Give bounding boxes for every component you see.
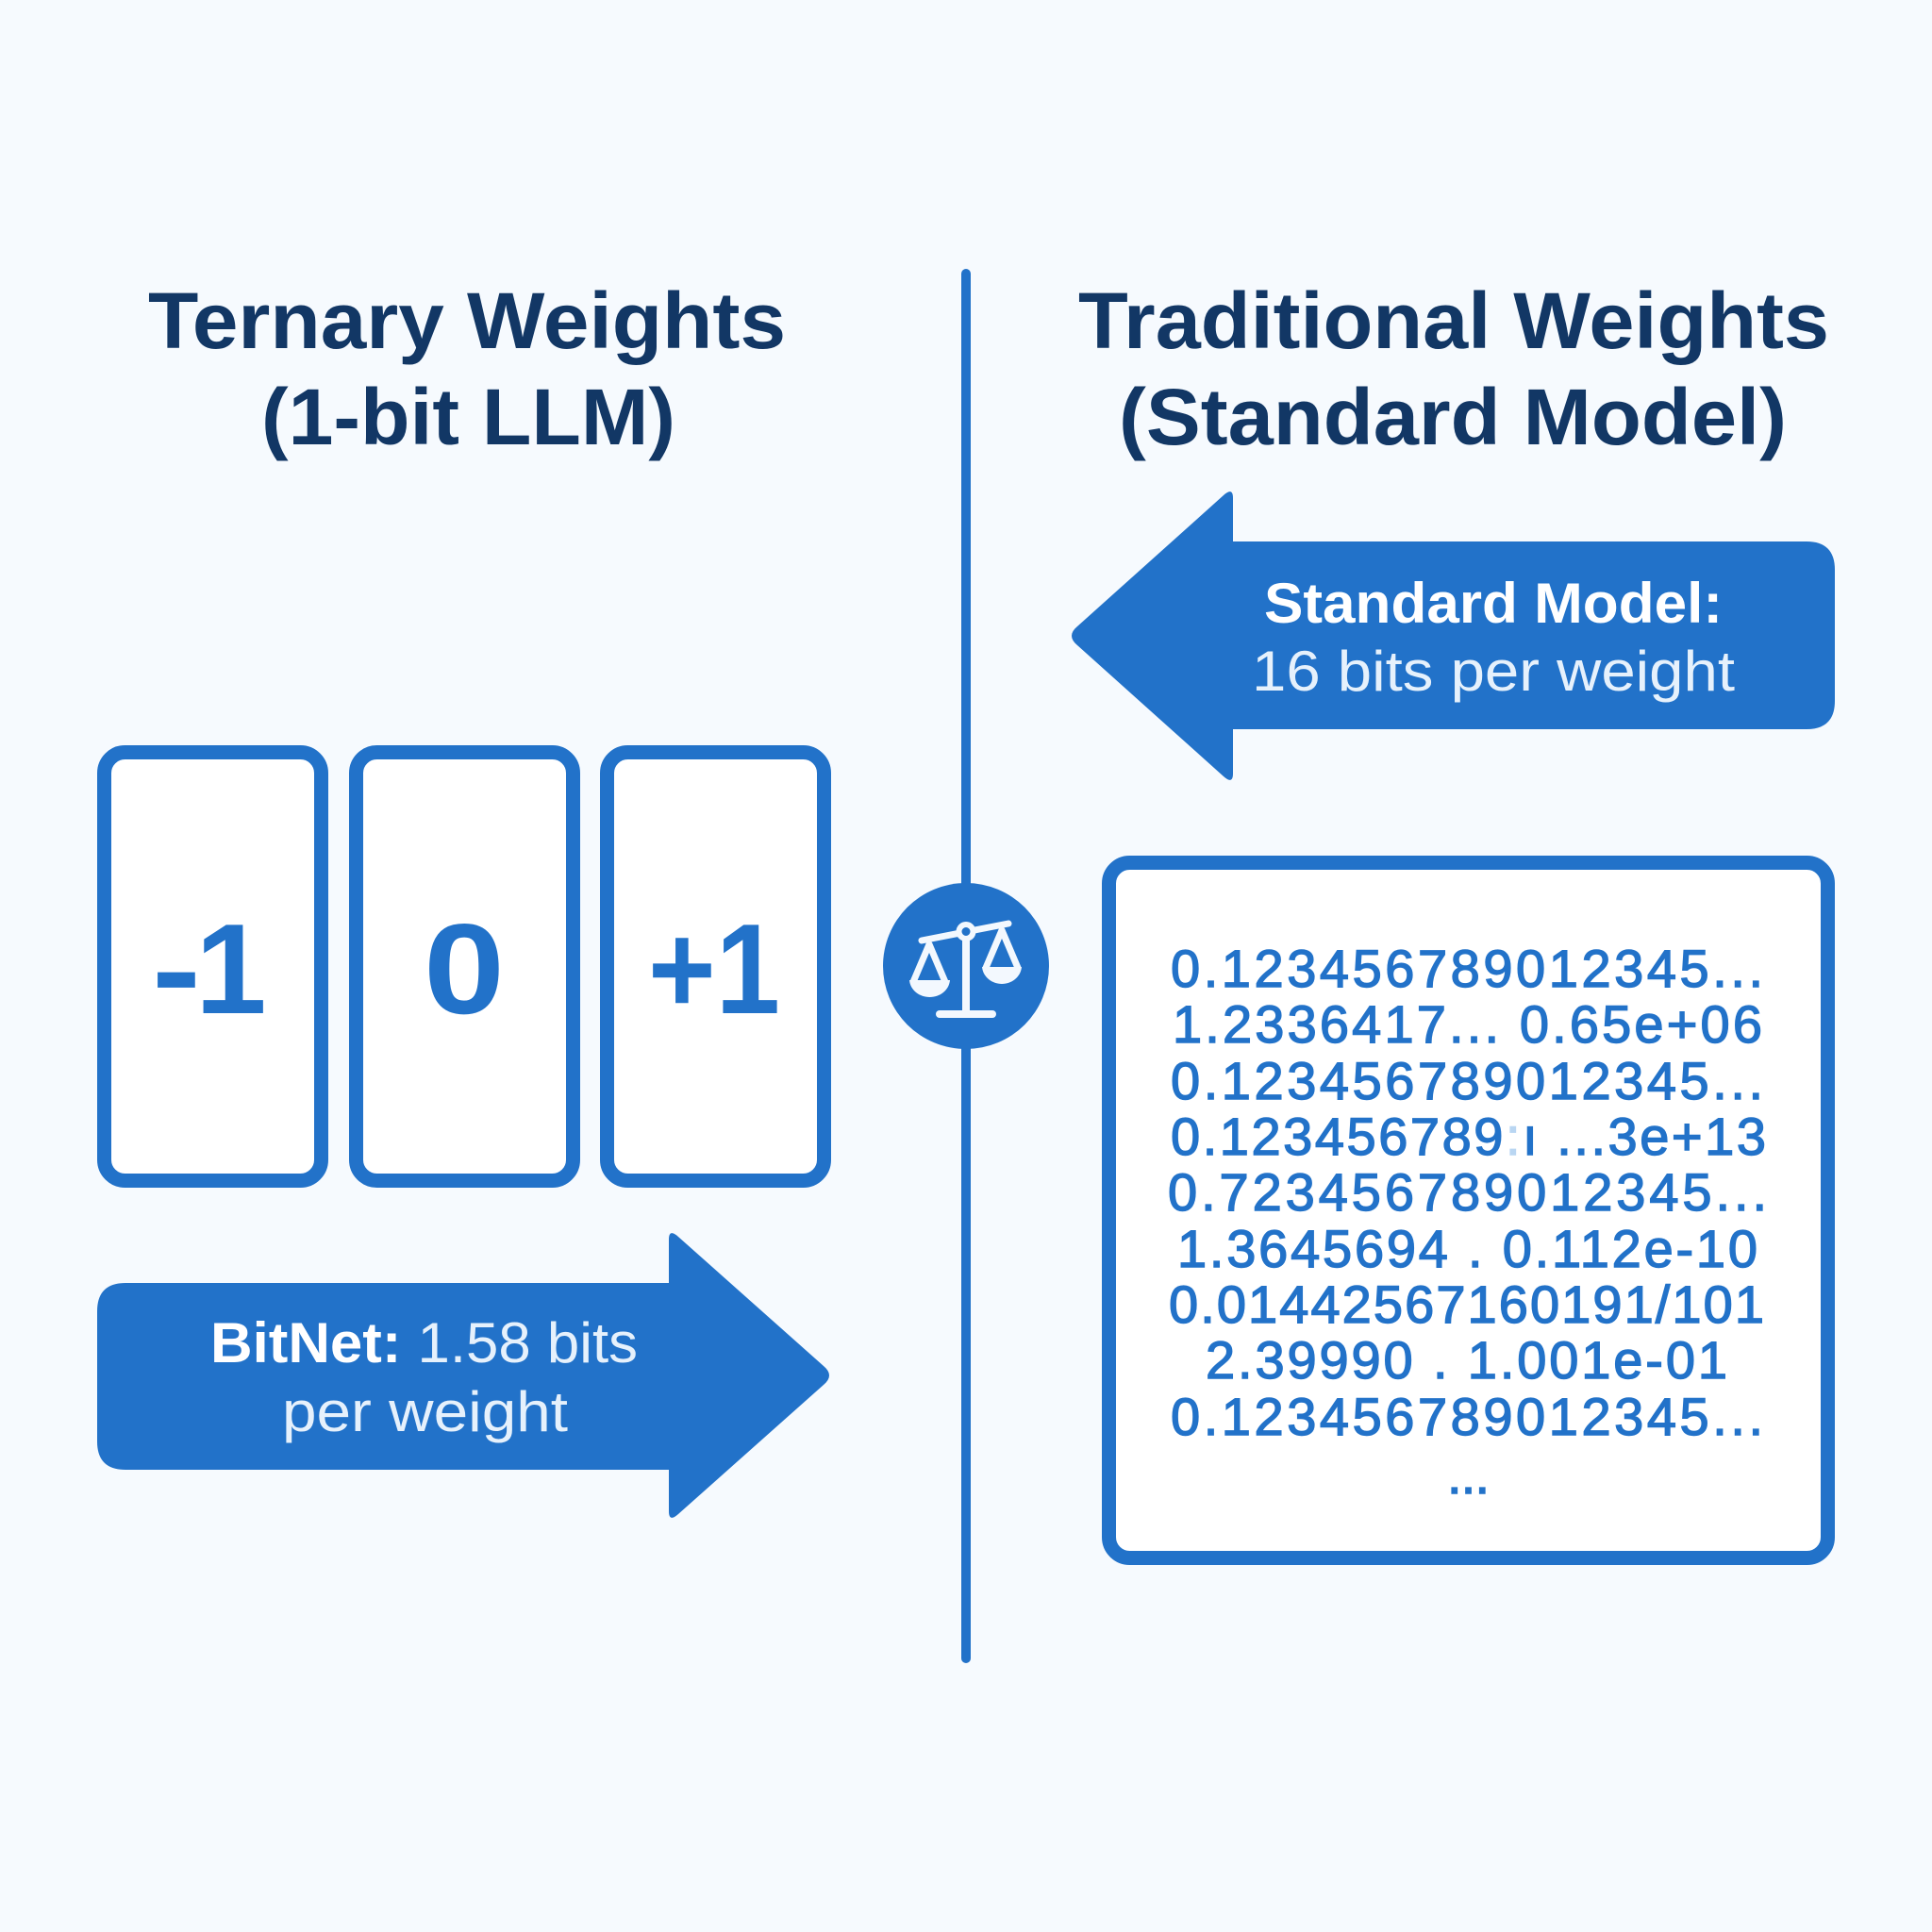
panel: floating point numbers <box>1109 862 1828 1558</box>
panel: floating point numbers: 0.723456789012345... <box>1168 1162 1767 1222</box>
heading: traditional weights: Traditional Weights <box>1078 276 1829 365</box>
card: -1: 1 <box>195 897 267 1041</box>
arrow callout: BitNet <box>97 1233 829 1518</box>
icon: balance scales in circle <box>883 883 1049 1049</box>
panel: floating point numbers: 0.123456789012345... <box>1171 1051 1763 1110</box>
panel: floating point numbers: 0.123456789:ı ...3e+13 <box>1171 1107 1766 1166</box>
heading: ternary weights <box>148 276 786 461</box>
panel: floating point numbers: 0.123456789012345... <box>1171 1387 1763 1446</box>
heading: ternary weights: Ternary Weights <box>148 276 786 365</box>
arrow callout: standard model: 16 bits per weight <box>1252 640 1735 703</box>
card: +1: +1 <box>648 897 780 1041</box>
card: 0: 0 <box>424 897 505 1041</box>
panel: floating point numbers: 2.39990 . 1.001e-01 <box>1206 1330 1727 1390</box>
heading: traditional weights: (Standard Model) <box>1119 373 1787 461</box>
card: -1: - <box>152 897 201 1041</box>
panel: floating point numbers: 0.01442567160191/101 <box>1169 1274 1764 1334</box>
panel: floating point numbers: 1.3645694 . 0.112e-10 <box>1177 1219 1757 1278</box>
heading: ternary weights: (1-bit LLM) <box>261 373 675 461</box>
panel: floating point numbers: ... <box>1447 1445 1490 1505</box>
arrow callout: BitNet: BitNet: 1.58 bits <box>210 1311 638 1374</box>
card: 0 <box>357 753 574 1181</box>
card: -1 <box>104 753 321 1181</box>
center divider line <box>961 269 971 1663</box>
panel: floating point numbers: 1.2336417... 0.65e+06 <box>1173 994 1762 1054</box>
panel: floating point numbers: 0.123456789012345... <box>1171 939 1763 998</box>
arrow callout: BitNet: per weight <box>282 1380 568 1443</box>
heading: traditional weights <box>1078 276 1829 461</box>
arrow callout: standard model: Standard Model: <box>1264 572 1723 635</box>
card: +1 <box>608 753 824 1181</box>
arrow callout: standard model <box>1072 491 1835 780</box>
